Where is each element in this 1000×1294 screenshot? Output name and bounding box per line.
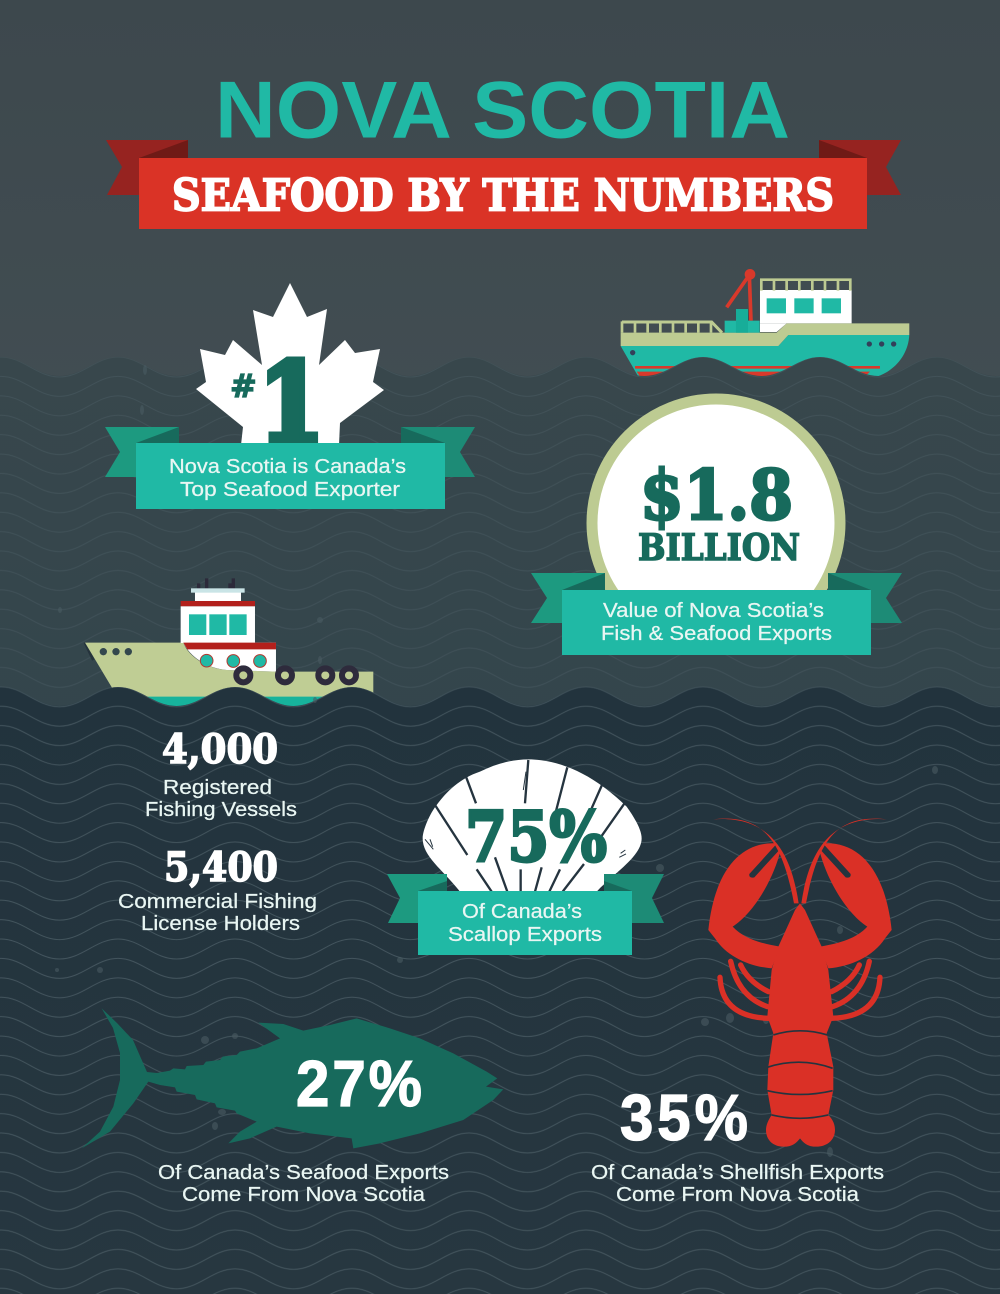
rank hash: # — [230, 367, 257, 405]
lower wave band — [0, 687, 1000, 1294]
title: NOVA SCOTIA — [215, 66, 790, 156]
panel: scallop exports — [387, 759, 664, 955]
lobster percentage: 35% — [620, 1082, 748, 1155]
ribbon tails — [105, 427, 475, 477]
tuna caption: Come From Nova Scotia — [182, 1184, 426, 1206]
stat: registered fishing vessels: Registered — [163, 777, 272, 799]
icon: large fishing ship — [621, 269, 909, 377]
stat: registered fishing vessels: 4,000 — [162, 726, 278, 773]
ribbon — [562, 590, 871, 655]
scallop percentage: 75% — [465, 797, 607, 878]
icon: lobster — [708, 819, 892, 1147]
tail segments — [767, 1031, 833, 1118]
banner subtitle: SEAFOOD BY THE NUMBERS — [172, 170, 834, 222]
icon: tuna fish — [82, 1008, 503, 1148]
rank number: 1 — [258, 339, 324, 468]
icon: tugboat — [85, 578, 373, 707]
ribbon — [418, 891, 632, 955]
panel: lobster shellfish stat — [591, 819, 892, 1206]
legs — [720, 961, 880, 1018]
tuna caption: Of Canada’s Seafood Exports — [158, 1162, 449, 1184]
ribbon text: Scallop Exports — [448, 924, 602, 946]
stat: license holders: License Holders — [141, 913, 300, 935]
icon: maple leaf — [196, 283, 384, 445]
tuna percentage: 27% — [296, 1048, 422, 1121]
paint splatters — [55, 365, 938, 1157]
panel: top exporter maple leaf — [105, 283, 475, 509]
stat: registered fishing vessels — [145, 726, 297, 821]
ribbon tails — [387, 874, 664, 923]
stat: license holders: Commercial Fishing — [118, 891, 317, 913]
stat: license holders — [118, 844, 317, 935]
stat: registered fishing vessels: Fishing Vessels — [145, 799, 297, 821]
red ribbon banner — [106, 140, 901, 229]
right claw — [819, 843, 892, 968]
ribbon text: Nova Scotia is Canada’s — [169, 456, 406, 478]
dollar value: $1.8 — [640, 456, 793, 536]
upper wave band — [0, 357, 1000, 760]
lobster caption: Of Canada’s Shellfish Exports — [591, 1162, 884, 1184]
ribbon text: Fish & Seafood Exports — [601, 623, 832, 645]
icon: scallop shell — [423, 759, 642, 892]
left claw slit — [749, 845, 779, 878]
antennae — [713, 819, 799, 903]
ribbon tails — [531, 573, 902, 623]
billion label: BILLION — [638, 527, 800, 569]
ribbon text: Of Canada’s — [462, 901, 582, 923]
ribbon text: Value of Nova Scotia’s — [603, 600, 824, 622]
panel: tuna seafood stat — [82, 1008, 503, 1206]
lobster caption: Come From Nova Scotia — [616, 1184, 860, 1206]
badge circle — [592, 399, 840, 647]
right claw slit — [821, 845, 851, 878]
panel: export value badge — [531, 399, 902, 655]
ribbon — [136, 443, 445, 509]
stat: license holders: 5,400 — [164, 844, 278, 891]
ribbon text: Top Seafood Exporter — [180, 479, 400, 501]
left claw — [708, 843, 781, 968]
